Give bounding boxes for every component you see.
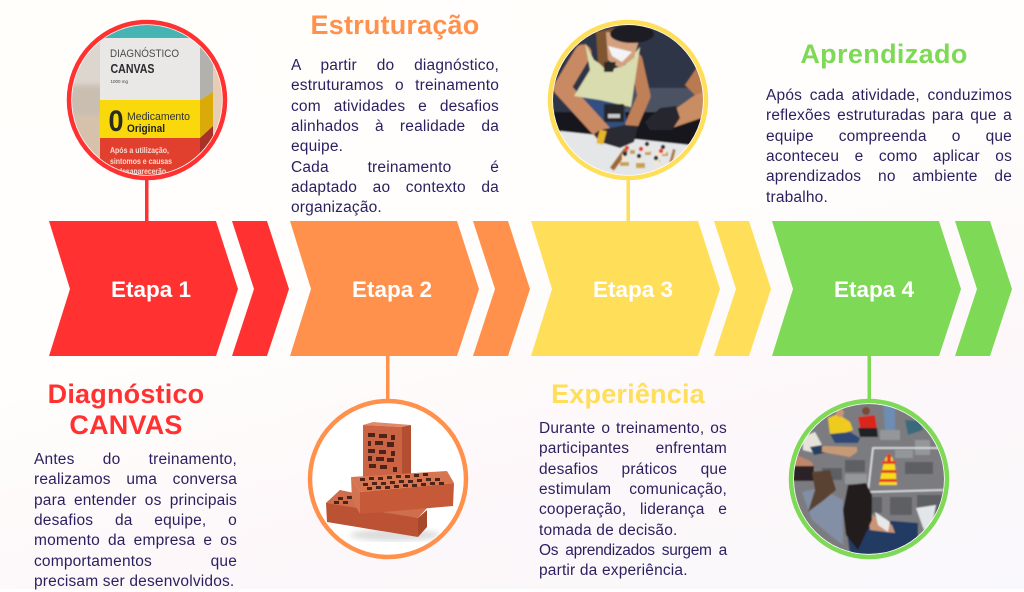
text block: Diagnóstico CANVAS: momento da empresa e os <box>34 532 237 549</box>
photo circle: hands-on activity <box>550 20 710 180</box>
text block: Estruturação: alinhados à realidade da <box>291 118 499 135</box>
photo circle: medicine box: Medicamento <box>127 111 190 123</box>
photo circle: medicine box: sintomos e causas <box>110 157 172 166</box>
text block: Diagnóstico CANVAS: Antes do treinamento, <box>34 451 237 468</box>
seated people, back row <box>828 414 853 436</box>
text block: Estruturação <box>291 57 499 216</box>
text block: Aprendizado: aconteceu e como aplicar os <box>766 148 1012 165</box>
text block: Estruturação: adaptado ao contexto da <box>291 179 499 196</box>
text block: Diagnóstico CANVAS: realizamos uma conversa <box>34 471 237 488</box>
label: Etapa 2: Etapa 2 <box>352 277 432 302</box>
heading: Diagnóstico CANVAS: CANVAS <box>69 410 183 440</box>
text block: Experiência: partir da experiência. <box>539 562 688 579</box>
floor square <box>868 448 943 492</box>
text block: Aprendizado <box>766 87 1012 206</box>
text block: Estruturação: equipe. <box>291 138 343 155</box>
text block: Experiência: tomada de decisão. <box>539 522 678 539</box>
text block: Experiência: participantes enfrentam <box>539 440 727 457</box>
woman left <box>802 488 843 545</box>
photo circle: medicine box <box>65 20 230 185</box>
brick: upright <box>363 422 411 480</box>
table <box>560 130 689 175</box>
chevrons: etapa 1 <box>49 221 289 356</box>
text block: Diagnóstico CANVAS: desafios da equipe, o <box>34 512 237 529</box>
text block: Estruturação: organização. <box>291 199 382 216</box>
text block: Experiência: Os aprendizados surgem a <box>539 542 727 559</box>
lanyard badge <box>604 104 624 122</box>
text block: Experiência: cooperação, liderança e <box>539 501 727 518</box>
photo circle: medicine box: DIAGNÓSTICO <box>110 47 179 60</box>
photo circle: medicine box: CANVAS <box>110 61 155 76</box>
text block: Estruturação: com atividades e desafios <box>291 98 499 115</box>
connector: etapa 4 <box>868 355 871 401</box>
tank top <box>574 43 640 107</box>
woman right <box>847 520 919 554</box>
brick: middle <box>351 471 454 514</box>
heading: Diagnóstico CANVAS: Diagnóstico <box>48 379 204 409</box>
photo circle: medicine box: 0 <box>108 105 124 138</box>
text block: Experiência: Durante o treinamento, os <box>539 420 727 437</box>
text block: Diagnóstico CANVAS <box>34 451 237 590</box>
jeans <box>582 97 627 128</box>
text block: Estruturação: Cada treinamento é <box>291 159 499 176</box>
chevrons: etapa 4 <box>772 221 1012 356</box>
label: Etapa 1: Etapa 1 <box>111 277 191 302</box>
photo circle: medicine box: Após a utilização, <box>110 146 169 155</box>
text block: Aprendizado: trabalho. <box>766 189 828 206</box>
cone <box>879 457 897 485</box>
heading: Estruturação: Estruturação <box>311 10 479 40</box>
text block: Experiência: estimulam comunicação, <box>539 481 727 498</box>
heading: Aprendizado: Aprendizado <box>800 39 968 69</box>
right person <box>673 92 703 128</box>
connector: etapa 1 <box>145 178 148 222</box>
chevrons: etapa 3 <box>531 221 771 356</box>
text block: Aprendizado: aprendizados no ambiente de <box>766 168 1012 185</box>
photo circle: medicine box: desaparecerão <box>118 167 166 176</box>
photo circle: bricks <box>310 401 466 557</box>
label: Etapa 4: Etapa 4 <box>834 277 914 302</box>
brick: bottom <box>326 490 427 537</box>
text block: Aprendizado: equipe compreenda o que <box>766 128 1012 145</box>
connector: etapa 2 <box>386 355 390 401</box>
chevrons: etapa 2 <box>290 221 530 356</box>
text block: Estruturação: A partir do diagnóstico, <box>291 57 499 74</box>
text block: Diagnóstico CANVAS: comportamentos que <box>34 553 237 570</box>
connector: etapa 3 <box>626 178 630 222</box>
heading: Experiência: Experiência <box>551 379 705 409</box>
heading: Diagnóstico CANVAS <box>48 379 204 440</box>
text block: Aprendizado: reflexões estruturadas para que a <box>766 107 1012 124</box>
photo circle: medicine box: Original <box>127 123 165 135</box>
text block: Aprendizado: Após cada atividade, conduzimos <box>766 87 1012 104</box>
left arm <box>562 53 604 134</box>
text block: Experiência <box>539 420 728 579</box>
text block: Estruturação: estruturamos o treinamento <box>291 77 499 94</box>
label: Etapa 3: Etapa 3 <box>593 277 673 302</box>
text block: Experiência: desafios práticos que <box>539 461 727 478</box>
papers <box>916 505 936 530</box>
right arm <box>632 60 644 124</box>
photo circle: medicine box: 1000 mg <box>110 79 129 84</box>
text block: Diagnóstico CANVAS: precisam ser desenvolvidos. <box>34 573 234 590</box>
gloves <box>594 125 638 148</box>
wooden pieces <box>610 148 628 171</box>
hair and face <box>596 28 614 70</box>
photo circle: group reflection <box>790 400 950 560</box>
text block: Diagnóstico CANVAS: para entender os principais <box>34 492 237 509</box>
left seated person <box>803 432 822 453</box>
